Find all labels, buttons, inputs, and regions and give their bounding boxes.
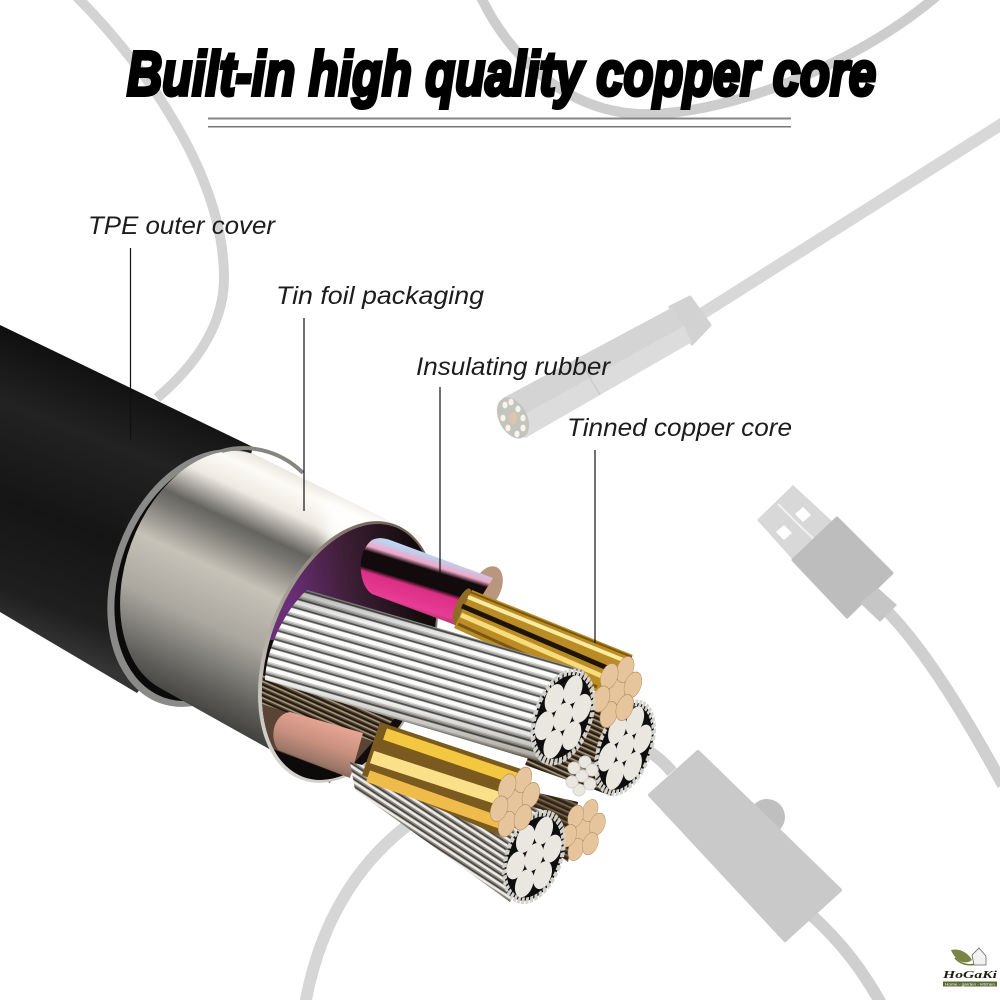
ghost endoscope camera: [490, 122, 1000, 444]
ghost USB plug and cable: [757, 485, 1000, 785]
label: Tin foil packaging: Tin foil packaging: [276, 282, 484, 310]
foil end opening: [224, 496, 472, 808]
interior wedges: [262, 524, 436, 780]
ghost inline switch and cable: [640, 747, 882, 1000]
small silver end: [566, 756, 598, 796]
label: Tinned copper core: Tinned copper core: [567, 414, 792, 442]
background cord: lower left arc: [305, 822, 412, 1000]
pink insulator upper: [361, 538, 509, 628]
lower silver strand bundle: [350, 762, 575, 909]
logo: HoGaKi: Home - garden - kitchen: [945, 982, 995, 987]
lower gold copper rods: [362, 722, 547, 844]
title double rule: [208, 118, 791, 128]
big silver strand bundle: [265, 590, 605, 770]
label: TPE outer cover: TPE outer cover: [88, 212, 277, 240]
logo: HoGaKi: [942, 948, 997, 987]
logo: HoGaKi: HoGaKi: [942, 970, 997, 981]
background cord: top arc: [480, 0, 938, 114]
tin foil sleeve: [120, 448, 425, 783]
cable cross-section: [0, 325, 665, 909]
back small copper bundle: [505, 790, 612, 867]
label: Insulating rubber: Insulating rubber: [416, 353, 612, 381]
pink insulator lower: [273, 712, 363, 778]
black TPE jacket: [0, 325, 337, 734]
back right silver bundle: [525, 695, 665, 801]
gold copper rods upper: [449, 586, 649, 734]
background cord: left arc: [75, 0, 224, 398]
